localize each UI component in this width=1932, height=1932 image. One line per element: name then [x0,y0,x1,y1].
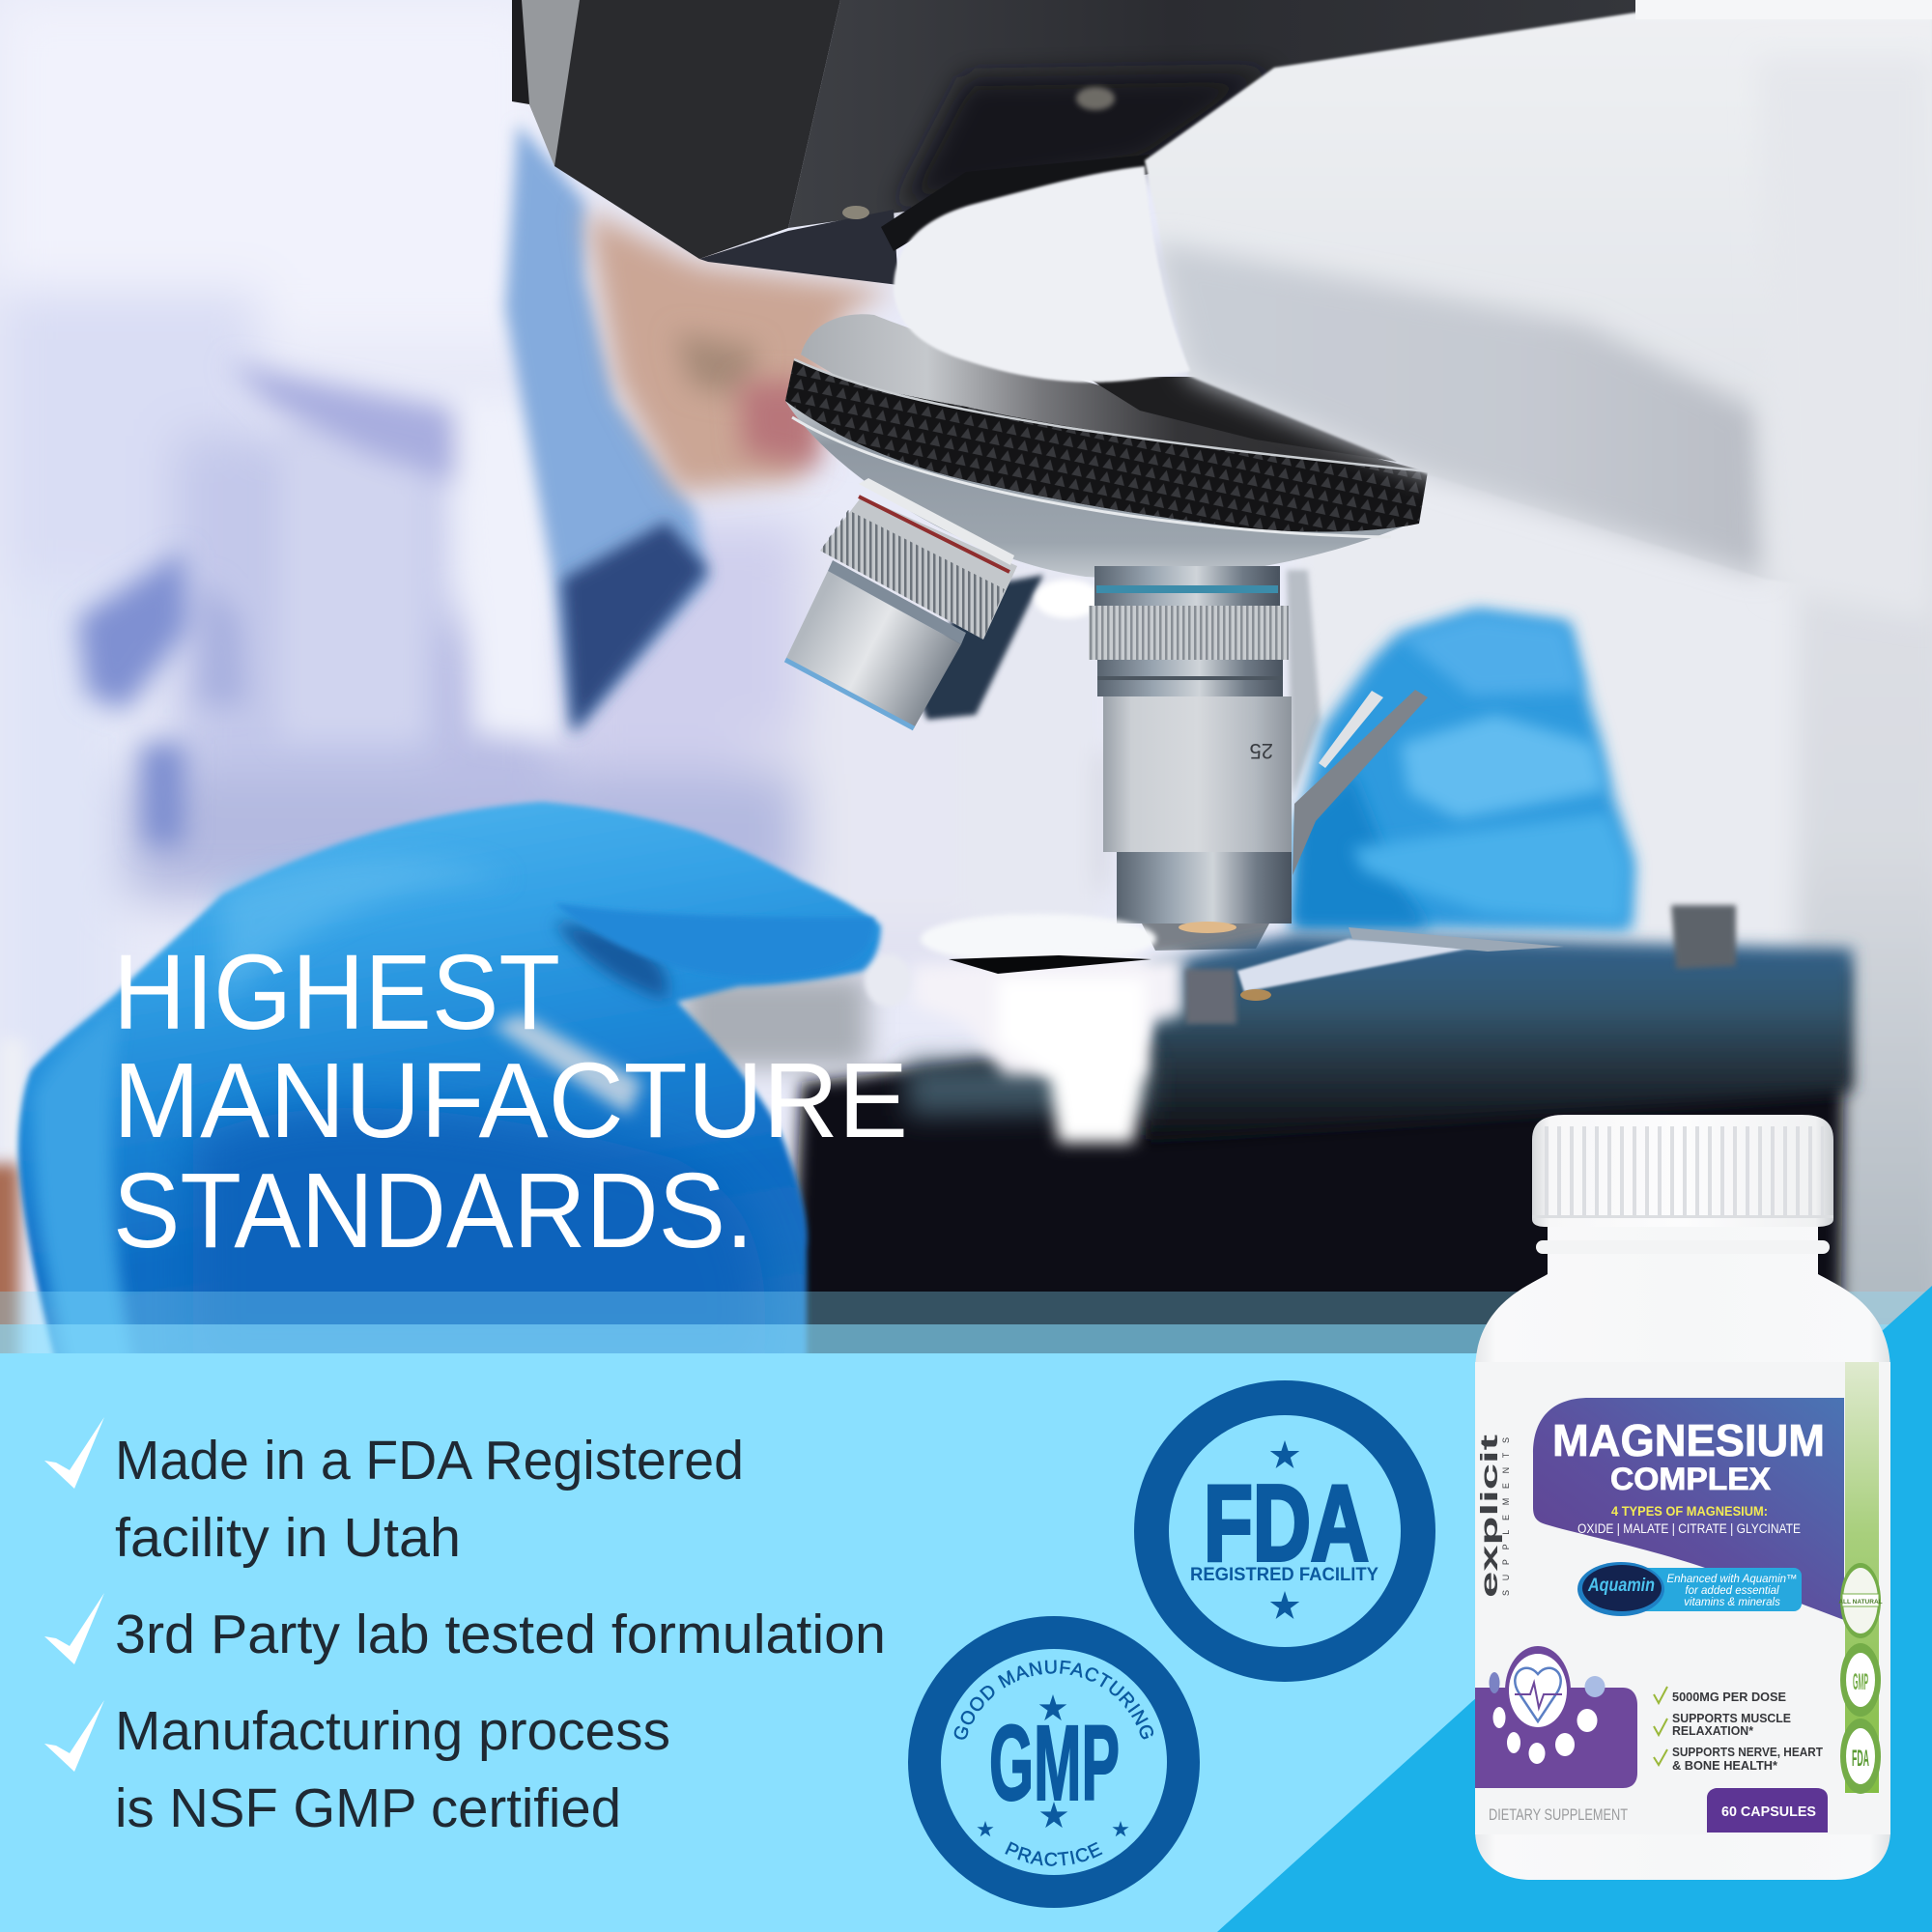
label benefit bullets: SUPPORTS MUSCLE [1672,1712,1791,1725]
bottle label background [1475,1362,1890,1834]
Aquamin callout [1577,1562,1802,1616]
panel: light blue lower area [0,1353,1932,1932]
label benefit bullets: RELAXATION* [1672,1724,1753,1738]
purple icon block [1475,1646,1637,1788]
dietary supplement line: DIETARY SUPPLEMENT [1489,1805,1628,1824]
item: FDA registered facility: Made in a FDA Registered [115,1430,744,1492]
capsule count tag [1707,1788,1828,1833]
label benefit bullets: 5000MG PER DOSE [1672,1690,1786,1704]
heading: MANUFACTURE [113,1041,908,1160]
right background wall [1054,595,1932,1331]
bottle neck ring [1536,1240,1830,1254]
item: third party lab tested: 3rd Party lab tested formulation [115,1604,886,1665]
dark tube and glare behind objectives [918,570,1321,795]
bottle cap [1532,1115,1833,1227]
microscope nosepiece turret [785,314,1428,578]
badge: FDA registered facility [1151,1398,1418,1664]
translucent bands at the base of the photo [0,1292,1932,1353]
brand logo: SUPPLEMENTS [1501,1437,1511,1596]
microscope white nose cone [894,166,1190,383]
capsule count tag: 60 CAPSULES [1721,1804,1816,1820]
item: NSF GMP certified: Manufacturing process [115,1700,670,1762]
magnesium types: OXIDE | MALATE | CITRATE | GLYCINATE [1577,1521,1801,1536]
purple title banner [1533,1398,1844,1620]
right gloved hand [1293,610,1634,930]
item: FDA registered facility [44,1417,744,1569]
corner triangle [1217,1286,1932,1932]
label benefit bullets: SUPPORTS NERVE, HEART [1672,1746,1823,1759]
left gloved hand [18,802,881,1372]
face [585,210,894,493]
label benefit bullets: & BONE HEALTH* [1672,1759,1777,1773]
mini badge: all natural [1838,1563,1883,1638]
Aquamin callout: Enhanced with Aquamin™ [1666,1574,1798,1585]
mini badge: GMP [1840,1643,1881,1717]
benefits list [44,1417,886,1839]
product name [1552,1415,1825,1496]
product name: MAGNESIUM [1552,1415,1825,1465]
microscope dark head [512,0,1642,285]
item: NSF GMP certified [44,1700,670,1839]
heading: HIGHEST [113,933,560,1052]
lab coat with soft lavender folds [0,0,1101,1377]
green strip [1845,1362,1879,1793]
Aquamin callout: Aquamin [1587,1576,1655,1596]
badge: GMP good manufacturing practice: GMP [989,1704,1120,1823]
label benefit bullets [1654,1687,1823,1773]
mini badge: FDA [1840,1719,1881,1794]
badge: GMP good manufacturing practice [908,1616,1200,1908]
microscope white arm [1145,0,1932,618]
badge: FDA registered facility: REGISTRED FACILITY [1190,1565,1378,1585]
Aquamin callout: for added essential [1685,1585,1779,1597]
main objective lens [1089,566,1292,951]
mini badge: all natural: ALL NATURAL [1838,1599,1883,1605]
brand logo [1476,1434,1511,1598]
microscope stage [787,905,1853,1372]
badge: FDA registered facility: FDA [1204,1463,1369,1583]
main objective lens: 25 [1250,739,1273,763]
product name: COMPLEX [1610,1462,1772,1496]
stage glare and slide [683,914,1564,1143]
tweezers [1293,690,1428,875]
scrub hood and collar [505,124,708,733]
left objective lens [785,478,1017,728]
mini badge: FDA: FDA [1852,1746,1869,1772]
magnesium types: 4 TYPES OF MAGNESIUM: [1611,1504,1768,1519]
photo: scientist at a microscope [0,0,1932,1391]
item: FDA registered facility: facility in Utah [115,1507,461,1569]
mini badge: GMP: GMP [1853,1669,1868,1695]
magnesium types [1577,1504,1801,1536]
badge: GMP good manufacturing practice: PRACTICE [1005,1841,1103,1866]
bottle body [1475,1226,1890,1880]
badge: GMP good manufacturing practice: GOOD MANUFACTURING [954,1660,1153,1740]
heading: STANDARDS. [113,1151,753,1270]
heading [113,933,908,1270]
Aquamin callout: vitamins & minerals [1684,1597,1780,1608]
item: NSF GMP certified: is NSF GMP certified [115,1777,621,1839]
product bottle [1475,1115,1890,1880]
brand logo: explicit [1476,1434,1503,1598]
